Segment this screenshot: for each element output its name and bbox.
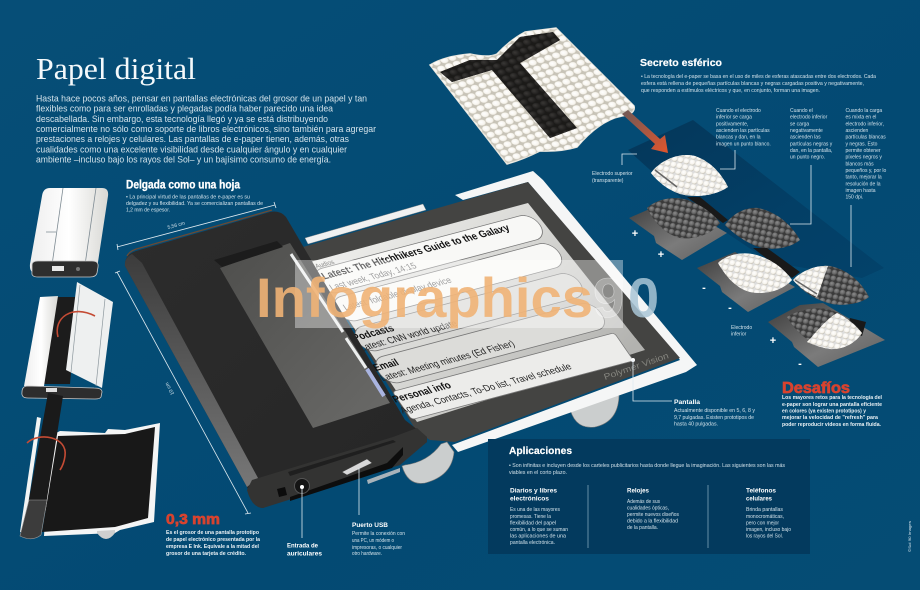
- label: electrodo superior: (transparente): [592, 178, 624, 184]
- label: 0,3 mm: 0,3 mm: [166, 512, 220, 528]
- panel: aplicaciones: Aplicaciones: [509, 445, 572, 457]
- slab buttons: [291, 254, 366, 368]
- label: electrodo inferior: [731, 325, 752, 338]
- intro text: cualidades como una excelente visibilidad desde cualquier ángulo y en cualquier: [36, 143, 347, 154]
- label: Puerto USB: Permite la conexión con: [352, 531, 405, 537]
- label: pantalla: Actualmente disponible en 5, 6, 8 y: [674, 408, 756, 414]
- section: Delgada como una hoja: [126, 180, 263, 214]
- section: Secreto esférico: Secreto esférico: [640, 57, 722, 69]
- title: Papel digital: [36, 51, 196, 86]
- label: Puerto USB: una PC, un módem o: [352, 538, 394, 544]
- label: electrodo inferior: Electrodo: [731, 325, 752, 331]
- dimension: height: [115, 271, 251, 514]
- callout: column 3: píxeles negros y: [846, 155, 882, 161]
- callout: column 2: [790, 108, 833, 224]
- label: Entrada de auriculares: Entrada de: [287, 542, 318, 550]
- screen: Last week, Today, 14:15: [327, 261, 419, 292]
- label: pantalla: Pantalla: [674, 399, 700, 406]
- section: Secreto esférico: • La tecnología del e-paper se basa en el uso de miles de esferas atascadas entre dos electrodos. Cada: [641, 74, 876, 80]
- section: Desafíos: e-paper son lograr una pantalla eficiente: [782, 402, 882, 408]
- upper electrode plane: [628, 120, 884, 278]
- callout: column 1: ascienden las partículas: [716, 128, 770, 134]
- plus and minus signs: +: [770, 335, 776, 347]
- brand: Polymer Vision: [602, 350, 670, 382]
- section: Delgada como una hoja: Delgada como una hoja: [126, 180, 241, 192]
- callout: column 2: dan, en la pantalla,: [790, 148, 832, 154]
- section: Desafíos: Desafíos: [782, 380, 850, 397]
- callout: column 3: es mixta en el: [846, 115, 876, 121]
- section: Desafíos: mejorar la velocidad de "refresh" para: [782, 415, 878, 421]
- sphere cluster 6 mixed: [787, 308, 862, 349]
- bezel: [303, 182, 680, 442]
- intro text: ambiente –incluso bajo los rayos del Sol– y un bajísimo consumo de energía.: [36, 153, 331, 164]
- column: diarios: promesas. Tiene la: [510, 514, 551, 520]
- label: Entrada de auriculares: auriculares: [287, 550, 322, 558]
- label: 0,3 mm: Es el grosor de una pantalla prototipo: [166, 530, 259, 536]
- callout: column 2: electrodo inferior: [790, 115, 828, 121]
- column: telefonos: celulares: [746, 496, 772, 502]
- column: telefonos: los rayos del Sol.: [746, 534, 783, 540]
- column: telefonos: imagen, incluso bajo: [746, 527, 791, 533]
- callout: column 3: Cuando la carga: [846, 108, 882, 114]
- plate A: [629, 200, 727, 260]
- callout: column 3: y negras. Esto: [846, 141, 878, 147]
- device unrolled: [20, 393, 160, 539]
- column: relojes: de la pantalla.: [627, 525, 658, 531]
- plus and minus signs: -: [728, 302, 732, 314]
- section: Delgada como una hoja: 1,2 mm de espesor.: [126, 208, 170, 214]
- column: relojes: cualidades ópticas,: [627, 506, 669, 512]
- frame: [452, 171, 697, 452]
- sphere sheet: [430, 28, 634, 164]
- label: Puerto USB: Puerto USB: [352, 522, 389, 529]
- section: Desafíos: en colores (ya existen prototipos) y: [782, 408, 866, 414]
- slab gray panel: [220, 243, 390, 428]
- screen: Personal info: [390, 380, 454, 405]
- knobs: [402, 386, 619, 483]
- column: diarios: [510, 488, 568, 546]
- callout: column 3: tanto, mejorar la: [846, 175, 882, 181]
- plus and minus signs: [632, 228, 802, 370]
- label: Puerto USB: [352, 468, 405, 557]
- callout: column 1: [716, 108, 771, 169]
- callout: column 2: un punto negro.: [790, 155, 825, 161]
- plus and minus signs: -: [702, 282, 706, 294]
- label: electrodo inferior: inferior: [731, 332, 747, 338]
- device opening: [22, 282, 113, 399]
- arrow: opening: [57, 312, 95, 337]
- usb port: [342, 459, 372, 475]
- screen: Latest: CNN world update: [357, 319, 460, 354]
- panel: aplicaciones: viables en el corto plazo.: [509, 470, 567, 476]
- audio jack: [294, 478, 310, 494]
- callout: column 2: partículas negras y: [790, 141, 833, 147]
- section: Delgada como una hoja: delgadez y su flexibilidad. Ya se comercializan pantallas de: [126, 201, 263, 207]
- plus and minus signs: +: [632, 228, 638, 240]
- callout: column 2: ascienden las: [790, 135, 821, 141]
- plate B: [697, 252, 795, 312]
- callout: column 1: positivamente,: [716, 121, 748, 127]
- credit: ©Sol 90 Images: [908, 521, 912, 552]
- callout: column 3: 150 dpi.: [846, 195, 863, 201]
- electrode diagram: [622, 110, 885, 370]
- intro text: comercialmente no sólo como soporte de libros electrónicos, sino también para agregar: [36, 123, 376, 134]
- sphere cluster 1 white: [651, 155, 728, 196]
- sphere cluster 2 gray: [647, 198, 720, 238]
- callout: column 1: inferior se carga: [716, 115, 752, 121]
- callout: column 1: Cuando el electrodo: [716, 108, 761, 114]
- column: telefonos: Brinda pantallas: [746, 507, 784, 513]
- callout: column 3: [846, 108, 886, 267]
- callout: column 3: pequeños y, por lo: [846, 168, 886, 174]
- callout: column 3: permite obtener: [846, 148, 881, 154]
- column: diarios: Diarios y libres: [510, 488, 557, 494]
- callout: column 3: partículas blancas: [846, 135, 886, 141]
- label: pantalla: [631, 358, 756, 428]
- label: Entrada de auriculares: [287, 485, 322, 558]
- arrow: red: [622, 110, 668, 153]
- screen: Agenda, Contacts, To-Do list, Travel schedule: [398, 362, 574, 416]
- plus and minus signs: -: [798, 358, 802, 370]
- dimension: width: 5,56 cm: [167, 221, 186, 231]
- sphere cluster 3 gray: [725, 208, 800, 249]
- label: pantalla: hasta 40 pulgadas.: [674, 422, 718, 428]
- column: diarios: pantalla electrónica.: [510, 540, 555, 546]
- dimension: height: 10 cm: [164, 381, 176, 396]
- callout: column 3: resolución de la: [846, 181, 881, 187]
- slab body: [125, 212, 427, 508]
- panel: aplicaciones: [488, 439, 810, 554]
- callout: column 3: imagen hasta: [846, 188, 876, 194]
- section: Secreto esférico: esfera está rellena de pequeñas partículas blancas y negras cargadas positiva y negativamente,: [641, 81, 864, 87]
- top tab: [305, 204, 426, 244]
- column: relojes: Además de sus: [627, 499, 660, 505]
- e-paper device: [125, 171, 697, 508]
- intro text: [36, 92, 376, 164]
- callout: column 3: ascienden: [846, 128, 869, 134]
- screen: Latest: The Hitchhikers Guide to the Galaxy: [320, 223, 513, 282]
- intro text: prestaciones a relojes y celulares. Las pantallas de e-paper tienen, además, otras: [36, 133, 349, 144]
- slab end cap: [247, 428, 427, 508]
- label: 0,3 mm: de papel electrónico presentada por la: [166, 537, 260, 543]
- callout: column 2: Cuando el: [790, 108, 813, 114]
- callout: column 3: blancos más: [846, 161, 874, 167]
- callout: column 3: electrodo inferior,: [846, 121, 884, 127]
- watermark: 0: [628, 266, 659, 329]
- screen: Email: [371, 358, 402, 374]
- column: relojes: permite nuevos diseños: [627, 512, 679, 518]
- section: Desafíos: poder reproducir videos en forma fluida.: [782, 422, 882, 428]
- label: pantalla: 9,7 pulgadas. Existen prototipos de: [674, 415, 754, 421]
- screen: Podcasts: [350, 323, 397, 344]
- screen: Latest: foldable display device: [341, 275, 454, 312]
- column: diarios: Es una de las mayores: [510, 507, 560, 513]
- panel: aplicaciones: • Son infinitas e incluyen desde los carteles publicitarios hasta donde llegue la imaginación. Las siguientes son las más: [509, 463, 786, 469]
- screen: Latest: Meeting minutes (Ed Fisher): [378, 339, 517, 384]
- section: Desafíos: [782, 380, 883, 428]
- label: 0,3 mm: grosor de una tarjeta de crédito.: [166, 551, 247, 557]
- device closed: [30, 188, 108, 277]
- label: Puerto USB: impresoras, o cualquier: [352, 545, 402, 551]
- watermark: Infographics: [256, 266, 593, 329]
- column: telefonos: monocromáticas,: [746, 514, 784, 520]
- section: Desafíos: Los mayores retos para la tecnología del: [782, 395, 883, 401]
- intro text: descabellada. Sin embargo, esta tecnología llegó y ya se está distribuyendo: [36, 113, 328, 124]
- section: Delgada como una hoja: • La principal virtud de las pantallas de e-paper es su: [126, 194, 250, 200]
- section: Secreto esférico: [640, 57, 876, 94]
- plus and minus signs: +: [658, 249, 664, 261]
- intro text: flexibles como para ser enrolladas y plegadas podía haber parecido una idea: [36, 103, 334, 114]
- callout: column 2: se carga: [790, 121, 809, 127]
- column: relojes: Relojes: [627, 488, 649, 494]
- section: Secreto esférico: que responden a estímulos eléctricos y que, en conjunto, forman una imagen.: [641, 88, 820, 94]
- label: electrodo superior: [592, 154, 637, 184]
- column: relojes: [627, 488, 679, 531]
- callout: column 2: negativamente: [790, 128, 823, 134]
- column: diarios: las aplicaciones de una: [510, 534, 566, 540]
- label: 0,3 mm: [166, 512, 260, 557]
- arrow: rolling: [27, 437, 65, 470]
- column: telefonos: pero con mejor: [746, 520, 779, 526]
- dimension: width: [117, 202, 276, 250]
- column: diarios: electrónicos: [510, 496, 549, 502]
- column: diarios: común, a lo que se suman: [510, 527, 568, 533]
- screen: Audios: [314, 259, 337, 270]
- sphere cluster 4 white: [718, 253, 792, 293]
- plate C: [768, 303, 885, 367]
- column: relojes: debido a la flexibilidad: [627, 518, 678, 524]
- black letter T: [440, 32, 577, 138]
- screen: [302, 203, 645, 422]
- watermark: 9: [593, 266, 624, 329]
- sphere cluster 5 mixed: [793, 266, 869, 305]
- label: 0,3 mm: empresa E Ink. Equivale a la mitad del: [166, 544, 260, 550]
- label: Puerto USB: otro hardware.: [352, 551, 382, 557]
- intro text: Hasta hace pocos años, pensar en pantallas electrónicas del grosor de un papel y tan: [36, 92, 367, 104]
- callout: column 1: imagen un punto blanco.: [716, 141, 771, 147]
- column: telefonos: Teléfonos: [746, 488, 776, 494]
- column: diarios: flexibilidad del papel: [510, 520, 556, 526]
- column: telefonos: [746, 488, 791, 540]
- callout: column 1: blancas y dan, en la: [716, 135, 761, 141]
- label: electrodo superior: Electrodo superior: [592, 171, 633, 177]
